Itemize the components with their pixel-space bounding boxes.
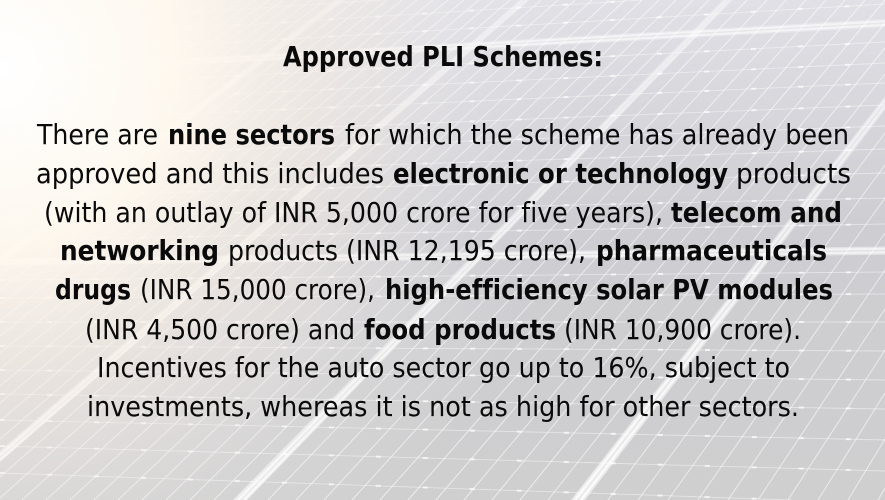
line 6: (INR 4,500 crore) and [85,313,355,346]
line 2: approved and this includes [36,157,384,190]
title: Approved PLI Schemes: [283,40,603,73]
text block: scheme description [36,118,851,423]
line 5 [55,273,833,306]
line 4: networking [60,234,219,267]
line 4: products (INR 12,195 crore), [228,234,586,267]
line 1: nine sectors [168,118,335,151]
line 5: (INR 15,000 crore), [140,273,375,306]
line 2: electronic or technology [393,157,728,190]
line 6: (INR 10,900 crore). [564,313,801,346]
line 2: products [736,157,851,190]
line 6: food products [364,313,556,346]
line 3: (with an outlay of INR 5,000 crore for five years), [44,196,663,229]
line 1 [36,118,849,151]
line 4 [60,234,827,267]
line 8: investments, whereas it is not as high for other sectors. [87,390,799,423]
line 5: drugs [55,273,131,306]
line 6 [85,313,801,346]
line 1: There are [36,118,158,151]
line 1: for which the scheme has already been [345,118,849,151]
line 7: Incentives for the auto sector go up to 16%, subject to [97,351,790,384]
line 2 [36,157,851,190]
line 3: telecom and [671,196,842,229]
line 4: pharmaceuticals [596,234,827,267]
